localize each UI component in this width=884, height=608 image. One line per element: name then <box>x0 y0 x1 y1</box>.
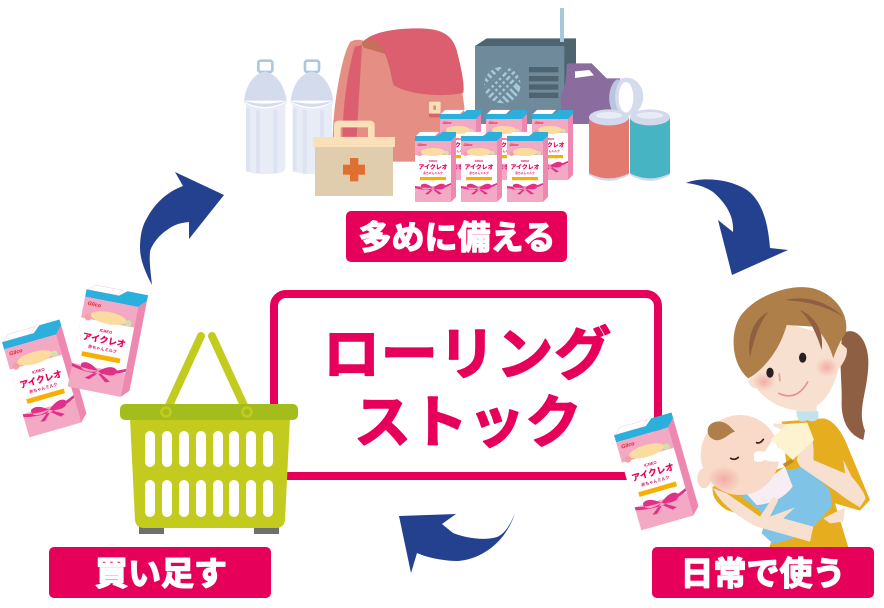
icon: teal can <box>630 109 670 181</box>
icon: tilted milk box by baby: ICREO <box>644 460 657 468</box>
label: 日常で使う: 日常で使う <box>680 555 846 592</box>
icon: milk box back 1 <box>440 110 481 180</box>
mother hair <box>734 287 846 378</box>
label: 買い足す <box>49 547 271 598</box>
icon: basket handles <box>166 336 247 412</box>
central panel: rolling stock <box>274 294 658 476</box>
mother body and sleeves <box>713 418 870 547</box>
icon: milk box front 3: Glico <box>510 143 519 147</box>
icon: milk box front 3 <box>507 132 548 202</box>
icon: milk box back 3: ICREO <box>546 137 554 141</box>
mother face and neck <box>748 323 847 417</box>
illustration: mother feeding baby <box>697 287 870 547</box>
arrow: rebuy to supplies <box>140 172 224 285</box>
arrow: supplies to daily use <box>686 179 788 275</box>
icon: tape roll <box>609 78 643 116</box>
icon: milk box front 1: 赤ちゃんミルク <box>423 171 443 175</box>
icon: milk box back 2: ICREO <box>500 137 508 141</box>
mother eyes, nose and mouth <box>766 353 808 396</box>
icon: milk box front 2 <box>461 132 502 202</box>
icon: milk box front 1: Glico <box>418 143 427 147</box>
mother arm holding bottle <box>797 427 866 507</box>
icon: water bottle left <box>243 61 287 174</box>
icon: radio <box>475 8 576 124</box>
icon: milk box front 3: アイクレオ <box>510 163 540 171</box>
icon: tilted milk box upper: Glico <box>87 301 102 309</box>
icon: tilted milk box by baby: Glico <box>621 441 636 451</box>
icon: milk box back 1: Glico <box>442 121 452 125</box>
icon: milk box front 1 <box>415 132 456 202</box>
icon: tilted milk box lower left: Glico <box>9 348 24 358</box>
icon: water bottle right <box>289 61 334 174</box>
icon: milk box back 2: 赤ちゃんミルク <box>494 149 514 153</box>
icon: milk box back 2: Glico <box>488 121 498 125</box>
icon: milk box back 2: アイクレオ <box>489 141 519 149</box>
icon: milk box back 2 <box>486 110 527 180</box>
baby body <box>742 467 832 544</box>
icon: tilted milk box upper: ICREO <box>99 328 113 335</box>
illustration: emergency supplies <box>243 8 670 196</box>
title: ローリング: ローリング <box>323 323 611 387</box>
arrow: daily use to rebuy <box>399 513 515 573</box>
icon: milk box back 3: Glico <box>534 121 544 125</box>
icon: milk box front 2: 赤ちゃんミルク <box>469 171 489 175</box>
icon: milk box back 3: 赤ちゃんミルク <box>540 149 560 153</box>
icon: first aid kit <box>313 124 395 196</box>
icon: tilted milk box upper: アイクレオ <box>82 331 127 349</box>
icon: milk box back 3: アイクレオ <box>535 141 565 149</box>
label: 多めに備える <box>346 211 567 262</box>
icon: purple water container <box>561 63 620 124</box>
icon: tilted milk box by baby <box>612 412 700 530</box>
icon: milk box front 3: 赤ちゃんミルク <box>515 171 535 175</box>
baby head <box>701 415 779 495</box>
icon: milk box back 1: ICREO <box>454 137 462 141</box>
icon: basket body <box>120 404 298 534</box>
icon: milk box back 1: アイクレオ <box>443 141 473 149</box>
icon: tilted milk box lower left: 赤ちゃんミルク <box>28 381 58 396</box>
label: 多めに備える: 多めに備える <box>358 219 556 256</box>
collar <box>796 411 818 422</box>
icon: milk box front 2: アイクレオ <box>464 163 494 171</box>
icon: milk box back 3 <box>532 110 573 180</box>
label: 買い足す: 買い足す <box>95 555 227 592</box>
icon: tilted milk box by baby: 赤ちゃんミルク <box>640 474 670 489</box>
icon: milk box front 1: アイクレオ <box>418 163 448 171</box>
icon: milk box back 1: 赤ちゃんミルク <box>448 149 468 153</box>
icon: tilted milk box upper <box>68 283 148 398</box>
icon: tilted milk box lower left <box>0 319 88 437</box>
icon: tilted milk box lower left: アイクレオ <box>19 369 63 390</box>
mother arm holding baby <box>713 488 813 542</box>
icon: tilted milk box upper: 赤ちゃんミルク <box>87 343 118 355</box>
illustration: shopping basket <box>120 336 298 534</box>
icon: backpack <box>333 28 464 162</box>
icon: tilted milk box by baby: アイクレオ <box>631 462 675 483</box>
ponytail <box>841 331 868 440</box>
icon: red can <box>589 109 629 181</box>
icon: tilted milk box lower left: ICREO <box>32 367 45 375</box>
icon: milk box front 3: ICREO <box>521 159 529 163</box>
title: ストック: ストック <box>354 391 582 455</box>
icon: milk box front 2: ICREO <box>475 159 483 163</box>
label: 日常で使う <box>652 547 874 598</box>
icon: milk box front 2: Glico <box>464 143 473 147</box>
icon: milk box front 1: ICREO <box>429 159 437 163</box>
baby bottle <box>754 423 814 467</box>
baby bib <box>747 467 793 505</box>
